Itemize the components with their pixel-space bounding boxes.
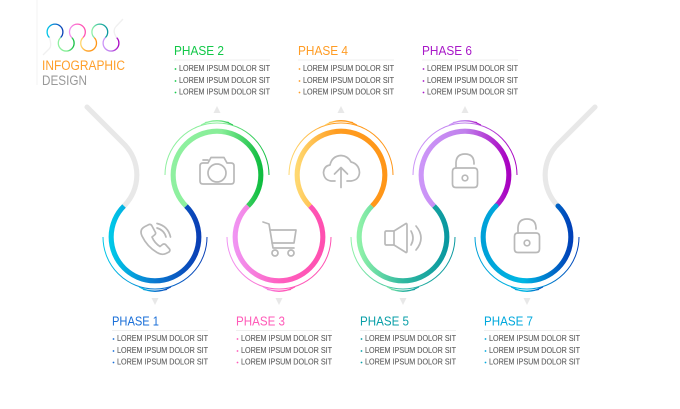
phase 6 text <box>422 43 518 96</box>
phase 3 text: LOREM IPSUM DOLOR SIT <box>241 334 332 343</box>
phase 6 ring <box>413 106 517 206</box>
phase 3 text: LOREM IPSUM DOLOR SIT <box>241 358 332 366</box>
phase 7 text: LOREM IPSUM DOLOR SIT <box>489 334 580 343</box>
icon: camera <box>200 158 234 184</box>
phase 1 text: LOREM IPSUM DOLOR SIT <box>117 346 208 355</box>
phase 4 text: LOREM IPSUM DOLOR SIT <box>303 76 394 85</box>
phase 4 text: PHASE 4 <box>298 43 348 58</box>
phase 1 ring <box>103 206 207 305</box>
phase 4 text: LOREM IPSUM DOLOR SIT <box>303 64 394 73</box>
phase 2 ring <box>165 106 269 206</box>
phase 6 text: LOREM IPSUM DOLOR SIT <box>427 88 518 96</box>
phase 2 text <box>174 43 270 96</box>
phase 5 text <box>360 314 456 366</box>
phase 2 text: LOREM IPSUM DOLOR SIT <box>179 88 270 96</box>
phase 7 ring <box>475 206 579 305</box>
logo <box>37 0 125 88</box>
left grey lead-in <box>87 107 137 206</box>
phase 6 text: LOREM IPSUM DOLOR SIT <box>427 76 518 85</box>
icon: speaker <box>385 224 421 252</box>
phase 1 text: LOREM IPSUM DOLOR SIT <box>117 334 208 343</box>
phase 7 text: LOREM IPSUM DOLOR SIT <box>489 346 580 355</box>
phase 7 text <box>484 314 580 366</box>
phase 4 text: LOREM IPSUM DOLOR SIT <box>303 88 394 96</box>
phase 6 text: LOREM IPSUM DOLOR SIT <box>427 64 518 73</box>
phase 1 text <box>112 314 208 366</box>
icon: cloud upload <box>324 156 360 188</box>
phase 3 text <box>236 314 332 366</box>
logo mark <box>43 19 123 55</box>
phase 3 text: PHASE 3 <box>236 314 285 328</box>
phase 6 text: PHASE 6 <box>422 43 472 58</box>
phase 7 text: LOREM IPSUM DOLOR SIT <box>489 358 580 366</box>
logo subtitle: DESIGN <box>42 73 87 88</box>
phase 4 ring <box>289 106 393 206</box>
phase 2 text: LOREM IPSUM DOLOR SIT <box>179 76 270 85</box>
phase 5 text: LOREM IPSUM DOLOR SIT <box>365 346 456 355</box>
phase 5 ring <box>351 206 455 305</box>
phase 1 text: PHASE 1 <box>112 314 159 328</box>
phase 5 text: LOREM IPSUM DOLOR SIT <box>365 334 456 343</box>
icon: open lock <box>514 219 540 252</box>
phase 1 text: LOREM IPSUM DOLOR SIT <box>117 358 208 366</box>
phase 3 ring <box>227 206 331 305</box>
phase 7 text: PHASE 7 <box>484 314 533 328</box>
phase 5 text: LOREM IPSUM DOLOR SIT <box>365 358 456 366</box>
phase 2 text: LOREM IPSUM DOLOR SIT <box>179 64 270 73</box>
icon: open lock <box>452 154 478 188</box>
logo title: INFOGRAPHIC <box>42 58 125 73</box>
phase 2 text: PHASE 2 <box>174 43 224 58</box>
right grey lead-in <box>545 107 595 206</box>
phase 5 text: PHASE 5 <box>360 314 409 328</box>
icon: phone <box>141 224 170 254</box>
icon: cart <box>263 222 296 256</box>
phase 4 text <box>298 43 394 96</box>
phase 3 text: LOREM IPSUM DOLOR SIT <box>241 346 332 355</box>
